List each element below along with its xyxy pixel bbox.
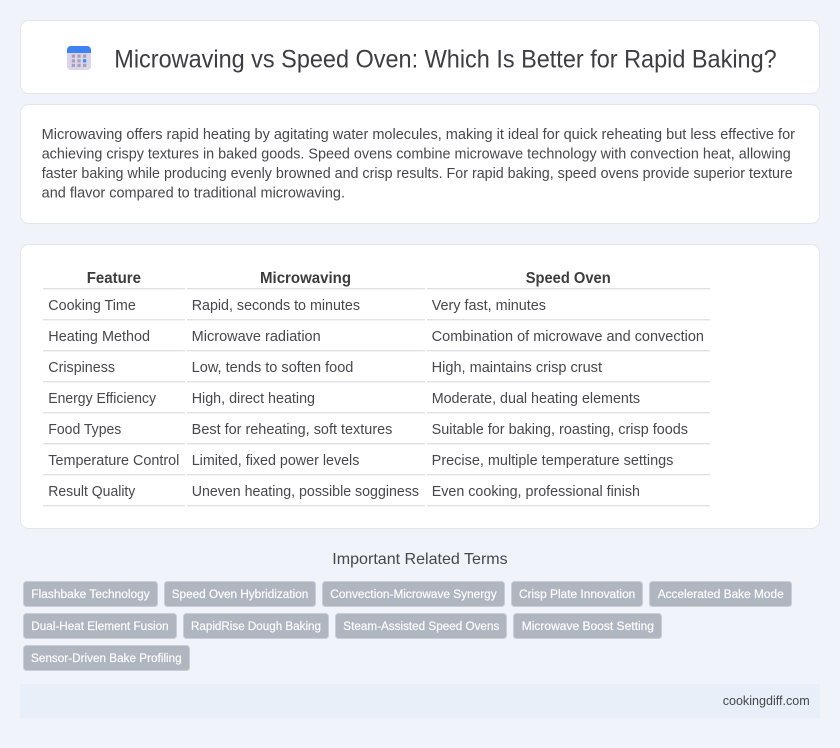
- table row: temperature control: Temperature Control: [48, 453, 179, 469]
- table header row: Microwaving: [260, 270, 351, 287]
- tag: sensor-driven bake profiling: [24, 646, 190, 670]
- table header row: [43, 270, 710, 289]
- tag: accelerated bake mode: Accelerated Bake Mode: [658, 587, 784, 601]
- table row: food types: Best for reheating, soft textures: [192, 422, 392, 438]
- footer source text: cookingdiff.com: [723, 693, 810, 708]
- text block: summary paragraph: faster baking while producing evenly browned and crisp results. For rapid baking, speed ovens provide superior texture: [42, 166, 793, 182]
- tag: convection-microwave synergy: Convection-Microwave Synergy: [330, 587, 498, 601]
- table row: heating method: Combination of microwave and convection: [432, 329, 704, 345]
- table row: crispiness: Crispiness: [48, 360, 115, 376]
- tag: microwave boost setting: Microwave Boost Setting: [522, 619, 654, 633]
- table row: temperature control: Precise, multiple temperature settings: [432, 453, 673, 469]
- tag: microwave boost setting: [514, 614, 662, 638]
- tag: dual-heat element fusion: [24, 614, 176, 638]
- text block: summary paragraph: [42, 127, 795, 202]
- tag: crisp plate innovation: Crisp Plate Innovation: [519, 587, 635, 601]
- table row: cooking time: Very fast, minutes: [432, 298, 546, 314]
- table row: temperature control: [43, 453, 710, 475]
- table header row: Speed Oven: [526, 270, 611, 287]
- tag: steam-assisted speed ovens: [336, 614, 506, 638]
- table row: temperature control: Limited, fixed power levels: [192, 453, 359, 469]
- table row: food types: Food Types: [48, 422, 121, 438]
- table row: crispiness: [43, 360, 710, 382]
- table row: food types: Suitable for baking, roasting, crisp foods: [432, 422, 688, 438]
- tag: speed oven hybridization: [164, 582, 316, 606]
- table row: cooking time: Rapid, seconds to minutes: [192, 298, 360, 314]
- tag: speed oven hybridization: Speed Oven Hybridization: [172, 587, 308, 601]
- table row: result quality: Even cooking, professional finish: [432, 484, 640, 500]
- table row: energy efficiency: Moderate, dual heating elements: [432, 391, 640, 407]
- table row: energy efficiency: High, direct heating: [192, 391, 315, 407]
- tag: steam-assisted speed ovens: Steam-Assisted Speed Ovens: [343, 619, 499, 633]
- table row: cooking time: Cooking Time: [48, 298, 136, 314]
- tag: flashbake technology: Flashbake Technology: [31, 587, 151, 601]
- tag: accelerated bake mode: [650, 582, 792, 606]
- tag: sensor-driven bake profiling: Sensor-Driven Bake Profiling: [31, 651, 182, 665]
- table row: crispiness: Low, tends to soften food: [192, 360, 353, 376]
- table row: heating method: Heating Method: [48, 329, 150, 345]
- text block: summary paragraph: achieving crispy textures in baked goods. Speed ovens combine microwave technology with convection heat, allowing: [42, 146, 791, 162]
- table row: result quality: Uneven heating, possible sogginess: [192, 484, 419, 500]
- table row: heating method: Microwave radiation: [192, 329, 321, 345]
- text block: summary paragraph: Microwaving offers rapid heating by agitating water molecules, making it ideal for quick reheating but less effective for: [42, 127, 795, 143]
- table row: result quality: [43, 484, 710, 506]
- table row: result quality: Result Quality: [48, 484, 136, 500]
- footer: [20, 684, 820, 718]
- tag: flashbake technology: [24, 582, 158, 606]
- tag: dual-heat element fusion: Dual-Heat Element Fusion: [31, 619, 169, 633]
- text block: summary paragraph: and flavor compared to traditional microwaving.: [42, 186, 345, 202]
- panel: title header: [20, 20, 820, 94]
- tag: convection-microwave synergy: [322, 582, 504, 606]
- heading: important related terms: Important Related Terms: [332, 551, 508, 568]
- table row: energy efficiency: Energy Efficiency: [48, 391, 157, 407]
- table row: heating method: [43, 329, 710, 351]
- panel: summary: [20, 104, 820, 224]
- icon: calendar: [67, 46, 91, 70]
- tag: crisp plate innovation: [512, 582, 642, 606]
- table row: energy efficiency: [43, 391, 710, 413]
- title: Microwaving vs Speed Oven: Which Is Better for Rapid Baking?: [114, 45, 777, 73]
- table row: cooking time: [43, 298, 710, 320]
- tag: rapidrise dough baking: RapidRise Dough Baking: [191, 619, 321, 633]
- tag: rapidrise dough baking: [184, 614, 328, 638]
- related term tags: [24, 582, 792, 670]
- table row: crispiness: High, maintains crisp crust: [432, 360, 602, 376]
- table row: food types: [43, 422, 710, 444]
- table header row: Feature: [87, 270, 141, 287]
- panel: comparison table: [20, 244, 820, 528]
